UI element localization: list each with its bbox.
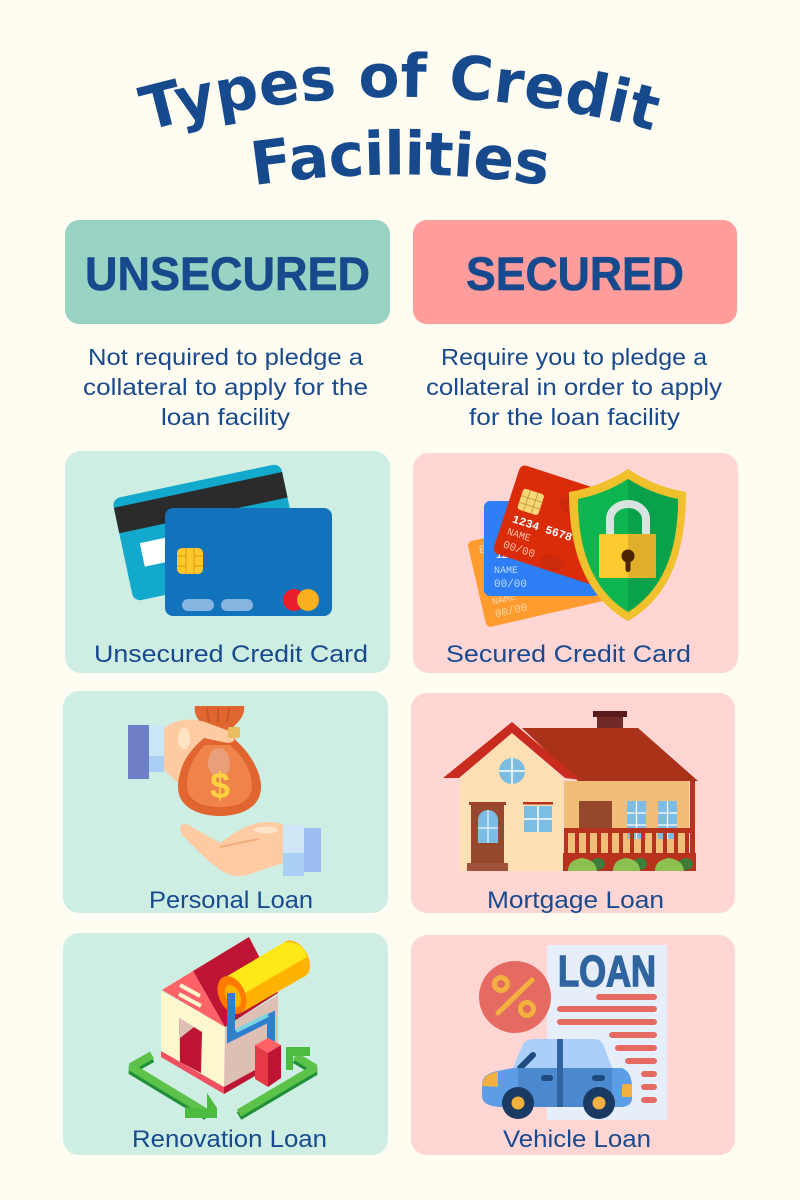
icon: cards and shield: NAME xyxy=(491,593,517,609)
text block: unsecured description xyxy=(83,344,368,430)
title: Facilities xyxy=(253,128,546,184)
text block: secured description xyxy=(426,344,723,430)
icon: hands and money bag: $ xyxy=(210,765,230,806)
text block: unsecured description: collateral to apply for the xyxy=(83,374,368,400)
panel: renovation loan xyxy=(63,933,388,1155)
text block: unsecured description: loan facility xyxy=(161,404,291,430)
panel: mortgage loan xyxy=(411,693,735,914)
icon: credit cards xyxy=(112,463,332,616)
label: vehicle loan: Vehicle Loan xyxy=(503,1126,651,1153)
label: secured credit card: Secured Credit Card xyxy=(446,641,691,668)
text block: unsecured description: Not required to pledge a xyxy=(88,344,363,370)
panel: secured header: SECURED xyxy=(466,247,684,300)
icon: cards and shield: E xyxy=(478,544,488,557)
icon: hands and money bag xyxy=(128,706,321,876)
panel: secured header xyxy=(413,220,737,324)
icon: cards and shield: 00/00 xyxy=(501,540,536,561)
text block: secured description: collateral in order to apply xyxy=(426,374,723,400)
icon: cards and shield: NAME xyxy=(505,527,532,545)
icon: cards and shield: 00/00 xyxy=(494,602,529,621)
icon: cards and shield: 00/00 xyxy=(494,579,527,591)
panel: personal loan xyxy=(63,691,388,914)
title xyxy=(136,51,660,184)
icon: house with paint roller xyxy=(131,935,316,1118)
panel: unsecured header: UNSECURED xyxy=(85,247,370,300)
panel: unsecured header xyxy=(65,220,390,324)
label: unsecured credit card: Unsecured Credit Card xyxy=(94,641,368,668)
title: Types of Credit xyxy=(136,51,660,134)
text block: secured description: Require you to pledge a xyxy=(441,344,707,370)
icon: loan document and car: LOAN xyxy=(558,947,656,996)
panel: vehicle loan xyxy=(411,935,735,1155)
icon: cards and shield: NAME xyxy=(494,566,518,577)
text block: secured description: for the loan facility xyxy=(469,404,681,430)
icon: cards and shield: 1234 5678 xyxy=(510,513,574,545)
icon: loan document and car xyxy=(479,945,667,1120)
label: personal loan: Personal Loan xyxy=(149,887,313,914)
label: renovation loan: Renovation Loan xyxy=(132,1126,327,1153)
panel: secured credit card xyxy=(413,453,738,673)
label: mortgage loan: Mortgage Loan xyxy=(487,887,664,914)
icon: cards and shield: 12 xyxy=(496,551,508,562)
icon: cards and shield xyxy=(467,464,686,628)
icon: house xyxy=(443,711,698,871)
panel: unsecured credit card xyxy=(65,451,390,673)
